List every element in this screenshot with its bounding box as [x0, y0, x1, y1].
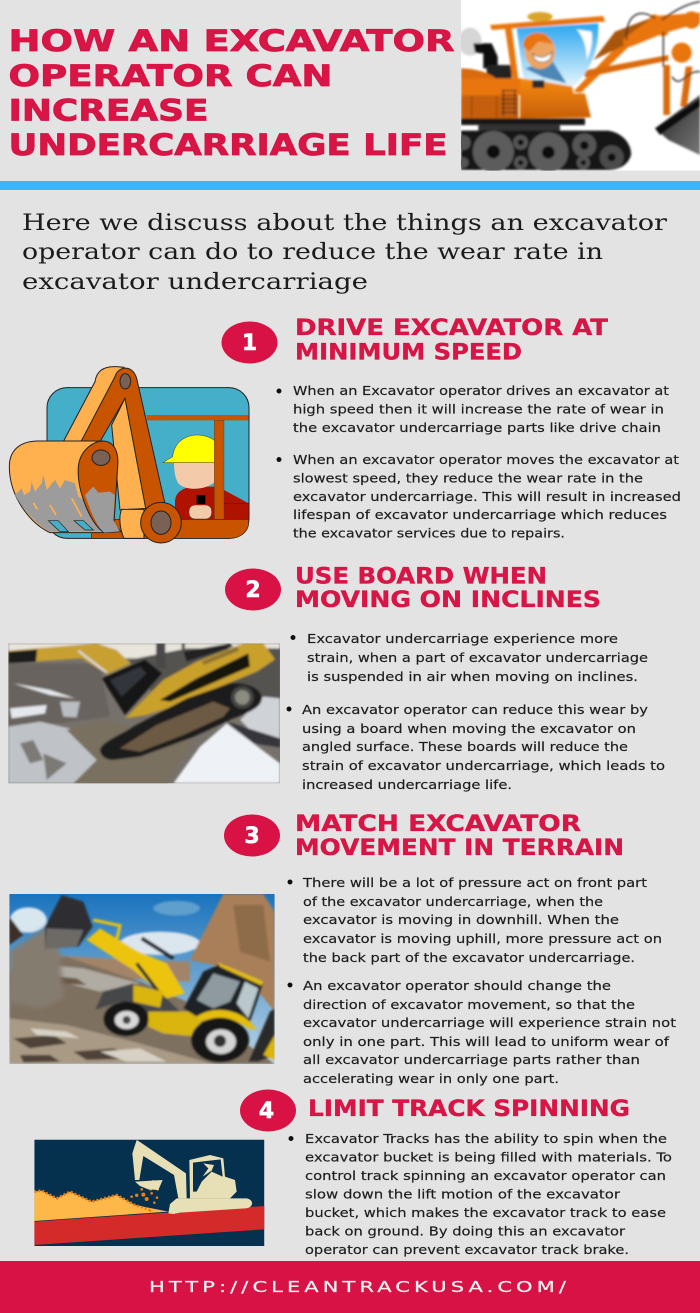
heading 3	[295, 812, 624, 861]
illustration: cartoon excavator operator	[9, 367, 249, 543]
bullets 1: When an excavator operator moves the excavator at	[293, 452, 679, 467]
heading 2: MOVING ON INCLINES	[295, 588, 601, 613]
number badge 4	[240, 1090, 296, 1132]
bullets 3	[288, 875, 676, 1086]
bullets 3: An excavator operator should change the	[303, 978, 611, 993]
bullets 4: operator can prevent excavator track brake.	[305, 1242, 629, 1257]
bullets 3: excavator is moving in downhill. When the	[303, 912, 619, 927]
bullets 4: excavator bucket is being filled with materials. To	[305, 1150, 672, 1164]
bullets 1: When an Excavator operator drives an excavator at	[293, 383, 669, 398]
bullets 2	[287, 631, 665, 792]
title	[8, 24, 455, 162]
footer band with URL: HTTP://CLEANTRACKUSA.COM/	[149, 1278, 570, 1296]
footer band with URL	[0, 1261, 700, 1313]
number badge 2	[225, 568, 281, 610]
bullets 3: all excavator undercarriage parts rather than	[303, 1052, 640, 1067]
bullets 2: An excavator operator can reduce this wear by	[302, 702, 649, 717]
bullets 4: bucket, which makes the excavator track to ease	[305, 1205, 666, 1220]
bullets 1	[277, 383, 681, 540]
hero image: cartoon excavator with driver	[456, 0, 700, 172]
bullets 1: high speed then it will increase the rate of wear in	[293, 402, 664, 416]
heading 1	[295, 316, 608, 366]
photo: yellow backhoe loader on rocky hillside	[9, 894, 275, 1064]
number badge 2: 2	[245, 578, 261, 603]
heading 3: MATCH EXCAVATOR	[295, 812, 581, 837]
bullets 1: the excavator services due to repairs.	[293, 526, 565, 540]
section 1	[9, 316, 681, 543]
intro text: Here we discuss about the things an excavator	[22, 210, 667, 236]
title: HOW AN EXCAVATOR	[8, 24, 455, 58]
bullets 2: strain, when a part of excavator undercarriage	[307, 650, 648, 665]
bullets 4: Excavator Tracks has the ability to spin when the	[305, 1131, 667, 1146]
bullets 3: excavator undercarriage will experience strain not	[303, 1015, 676, 1030]
heading 1: DRIVE EXCAVATOR AT	[295, 316, 608, 341]
bullets 3: There will be a lot of pressure act on front part	[302, 875, 647, 890]
bullets 4	[289, 1131, 672, 1257]
number badge 3: 3	[244, 824, 260, 849]
bullets 4: back on ground. By doing this an excavator	[305, 1224, 626, 1238]
heading 4: LIMIT TRACK SPINNING	[308, 1097, 630, 1122]
blue divider bar	[0, 181, 700, 190]
number badge 1: 1	[242, 331, 257, 356]
number badge 1	[222, 322, 278, 364]
section 3	[9, 812, 676, 1086]
bullets 3: direction of excavator movement, so that the	[303, 997, 635, 1012]
section 4	[34, 1090, 672, 1257]
bullets 2: using a board when moving the excavator on	[302, 721, 636, 736]
illustration: mini excavator silhouette digging	[34, 1140, 264, 1246]
heading 2	[295, 564, 601, 613]
bullets 2: is suspended in air when moving on inclines.	[307, 669, 638, 684]
bullets 2: strain of excavator undercarriage, which leads to	[302, 758, 665, 773]
bullets 2: increased undercarriage life.	[302, 777, 512, 792]
section 2	[8, 564, 665, 792]
heading 1: MINIMUM SPEED	[295, 340, 522, 366]
bullets 1: the excavator undercarriage parts like drive chain	[293, 420, 661, 435]
intro text	[22, 210, 667, 295]
bullets 3: accelerating wear in only one part.	[303, 1071, 559, 1086]
photo: tilted excavator on snowy slope	[8, 643, 280, 783]
bullets 4: control track spinning an excavator operator can	[305, 1168, 666, 1183]
number badge 4: 4	[259, 1099, 274, 1124]
title: UNDERCARRIAGE LIFE	[8, 128, 448, 162]
title: INCREASE	[8, 94, 209, 128]
number badge 3	[224, 814, 280, 856]
heading 3: MOVEMENT IN TERRAIN	[295, 836, 624, 861]
bullets 2: angled surface. These boards will reduce the	[302, 739, 628, 754]
bullets 3: excavator is moving uphill, more pressure act on	[303, 931, 662, 946]
bullets 1: lifespan of excavator undercarriage which reduces	[293, 507, 667, 522]
heading 2: USE BOARD WHEN	[295, 564, 547, 590]
intro text: excavator undercarriage	[22, 269, 368, 295]
bullets 3: the back part of the excavator undercarriage.	[303, 950, 635, 965]
intro text: operator can do to reduce the wear rate in	[22, 239, 603, 265]
bullets 3: only in one part. This will lead to uniform wear of	[303, 1034, 670, 1049]
bullets 3: of the excavator undercarriage, when the	[303, 894, 603, 909]
title: OPERATOR CAN	[8, 59, 332, 93]
bullets 1: excavator undercarriage. This will result in increased	[293, 489, 681, 504]
bullets 1: slowest speed, they reduce the wear rate in the	[293, 470, 643, 486]
bullets 2: Excavator undercarriage experience more	[307, 631, 618, 646]
bullets 4: slow down the lift motion of the excavator	[305, 1186, 621, 1202]
